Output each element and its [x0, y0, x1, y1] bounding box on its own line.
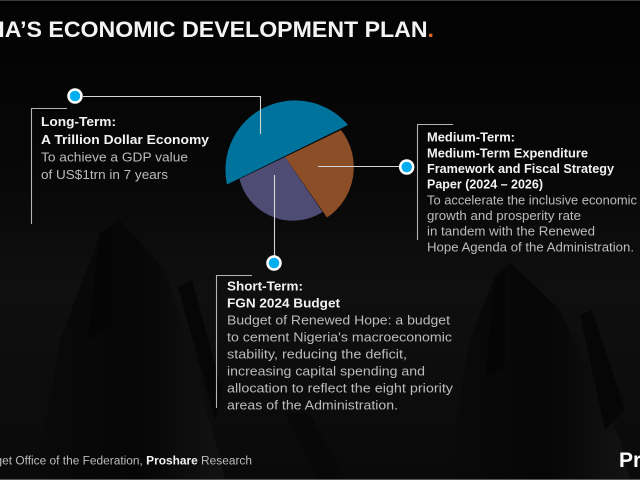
panel: short-term: stability, reducing the deficit, — [227, 347, 407, 362]
connector: long-term — [68, 90, 260, 134]
panel: short-term: areas of the Administration. — [227, 398, 398, 413]
panel: long-term: To achieve a GDP value — [41, 150, 188, 164]
panel: medium-term: Paper (2024 – 2026) — [427, 177, 543, 192]
panel: short-term: to cement Nigeria's macroeconomic — [227, 330, 453, 345]
panel: short-term — [216, 276, 454, 413]
panel: short-term: Budget of Renewed Hope: a budget — [227, 313, 450, 328]
panel: medium-term: in tandem with the Renewed — [427, 224, 595, 239]
panel: short-term: increasing capital spending and — [227, 364, 425, 379]
panel: long-term: A Trillion Dollar Economy — [41, 132, 210, 147]
panel: short-term: FGN 2024 Budget — [227, 296, 341, 311]
bottom edge — [0, 479, 640, 480]
panel: long-term: of US$1trn in 7 years — [41, 167, 169, 182]
connector: short-term — [268, 175, 280, 270]
panel: short-term: Short-Term: — [227, 279, 303, 294]
panel: medium-term: growth and prosperity rate — [427, 208, 581, 223]
panel: medium-term: Hope Agenda of the Administration. — [427, 240, 634, 254]
pie chart — [225, 100, 354, 221]
panel: medium-term: To accelerate the inclusive economic — [427, 192, 637, 207]
panel: medium-term: Medium-Term: — [427, 130, 515, 145]
connector: medium-term — [318, 160, 413, 174]
slice: long-term — [225, 100, 348, 184]
top edge — [0, 0, 640, 1]
panel: short-term: allocation to reflect the eight priority — [227, 381, 454, 396]
panel: medium-term: Framework and Fiscal Strategy — [427, 161, 615, 176]
panel: long-term: Long-Term: — [41, 114, 116, 129]
slice: short-term — [240, 157, 322, 221]
panel: long-term — [32, 108, 210, 224]
panel: medium-term: Medium-Term Expenditure — [427, 145, 588, 160]
slice: medium-term — [285, 130, 354, 218]
panel: medium-term — [418, 124, 637, 254]
